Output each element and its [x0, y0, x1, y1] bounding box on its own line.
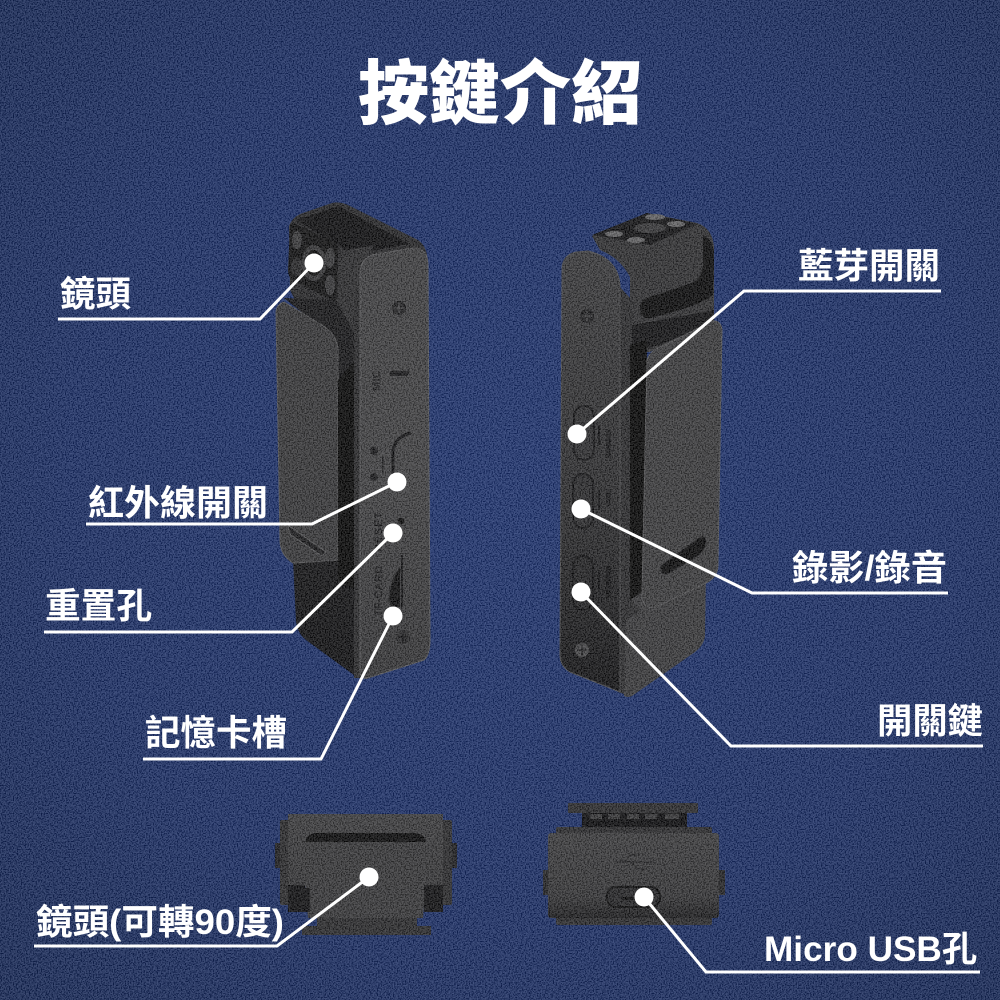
card slot edge: [401, 555, 403, 607]
camera lens plate: [288, 223, 338, 301]
rear panel: [560, 251, 620, 692]
device: rotated lens module: [275, 814, 457, 935]
callout: memory card slot: 記憶卡槽: [145, 713, 287, 753]
callout: micro usb port: Micro USB孔: [764, 929, 977, 969]
callout: reset hole: [44, 524, 402, 632]
lower body: [293, 500, 366, 678]
device: USB end view: [543, 803, 725, 925]
callout: micro usb port: [634, 888, 980, 972]
callout: memory card slot: [143, 606, 402, 759]
callout: infrared switch: [86, 472, 406, 524]
callout: video/audio recording: 錄影/錄音: [792, 548, 947, 588]
usb symbol: [617, 855, 654, 869]
button record: [573, 474, 593, 528]
mic text: MIC: [371, 370, 383, 391]
clip lower slot: [288, 526, 326, 556]
callout: power key: 開關鍵: [877, 701, 983, 741]
upper shadow: [284, 298, 358, 400]
rear screw top: [580, 309, 594, 323]
camera head: [289, 202, 428, 345]
rear spine: [618, 285, 640, 694]
reset hole: [398, 518, 404, 524]
callout: lens rotates 90 degrees: [34, 868, 378, 946]
callout: reset hole: 重置孔: [45, 586, 152, 626]
side rail: [354, 290, 361, 678]
title: 按鍵介紹: [358, 55, 642, 133]
reset text: RESET: [373, 512, 385, 552]
button power: [573, 556, 593, 610]
rear head slot: [640, 235, 714, 318]
callout: infrared switch: 紅外線開關: [88, 483, 268, 523]
device: front view with camera: [276, 202, 430, 678]
clip slot: [661, 537, 706, 574]
callout: lens rotates 90 degrees: 鏡頭(可轉90度): [36, 902, 284, 942]
device: rear view with clip: [560, 213, 722, 697]
rear screw bottom: [575, 643, 589, 657]
button bluetooth: [574, 406, 594, 460]
callout: lens: [58, 254, 324, 319]
infrared switch slot: [393, 433, 411, 476]
rear head top: [592, 213, 697, 245]
callout: lens: 鏡頭: [60, 274, 131, 314]
callout: video/audio recording: [572, 500, 948, 593]
callout: bluetooth switch: [568, 246, 941, 444]
micro usb port: [607, 887, 660, 907]
screw bottom: [396, 630, 410, 644]
callout: bluetooth switch: 藍芽開關: [798, 246, 940, 286]
face panel: [360, 248, 430, 678]
rear top lenses: [605, 214, 685, 243]
rear clip: [642, 321, 722, 607]
black slit: [630, 340, 647, 600]
clip back: [276, 302, 338, 563]
card slot: [389, 567, 400, 607]
screw top: [392, 301, 406, 315]
infrared marks: [370, 447, 384, 481]
button marks: [598, 425, 611, 598]
rear head shadow: [630, 310, 714, 352]
black slit: [338, 360, 355, 590]
callout: power key: [572, 582, 983, 746]
rear head: [592, 213, 714, 352]
rear lower body: [624, 570, 706, 697]
card text: TF-CARD: [373, 566, 385, 616]
mic hole: [390, 368, 409, 376]
